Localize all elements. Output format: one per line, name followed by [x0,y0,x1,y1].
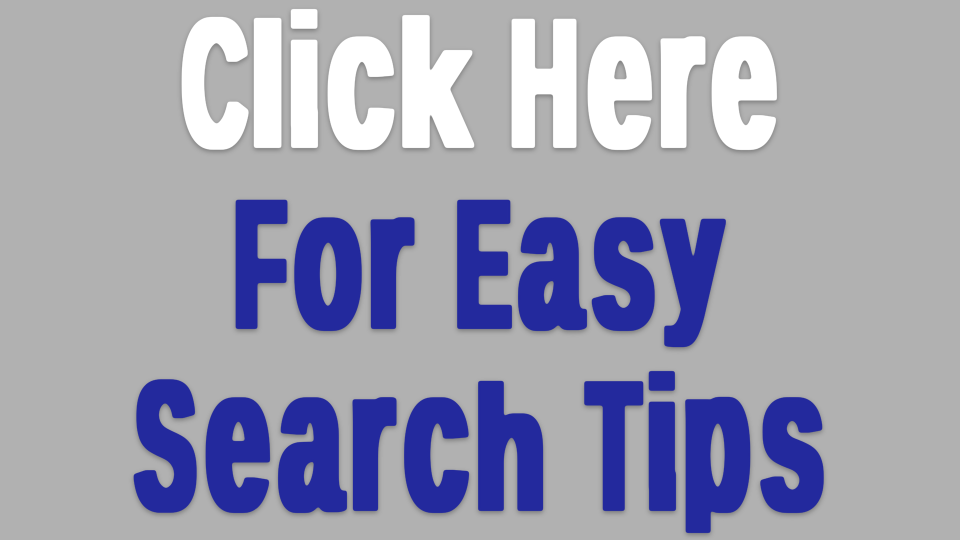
heading: For Easy [235,147,722,370]
heading: Search Tips: i [646,346,678,520]
heading: For Easy: a [520,147,582,370]
heading: For Easy: s [593,147,654,370]
heading: For Easy: y [664,157,722,346]
poster canvas [132,9,826,538]
heading: For Easy: E [457,162,510,366]
heading: For Easy: F [235,162,286,366]
heading: For Easy: o [295,147,361,370]
heading: Click Here [183,0,776,189]
heading: Search Tips [132,370,826,538]
heading: For Easy: r [368,147,411,370]
